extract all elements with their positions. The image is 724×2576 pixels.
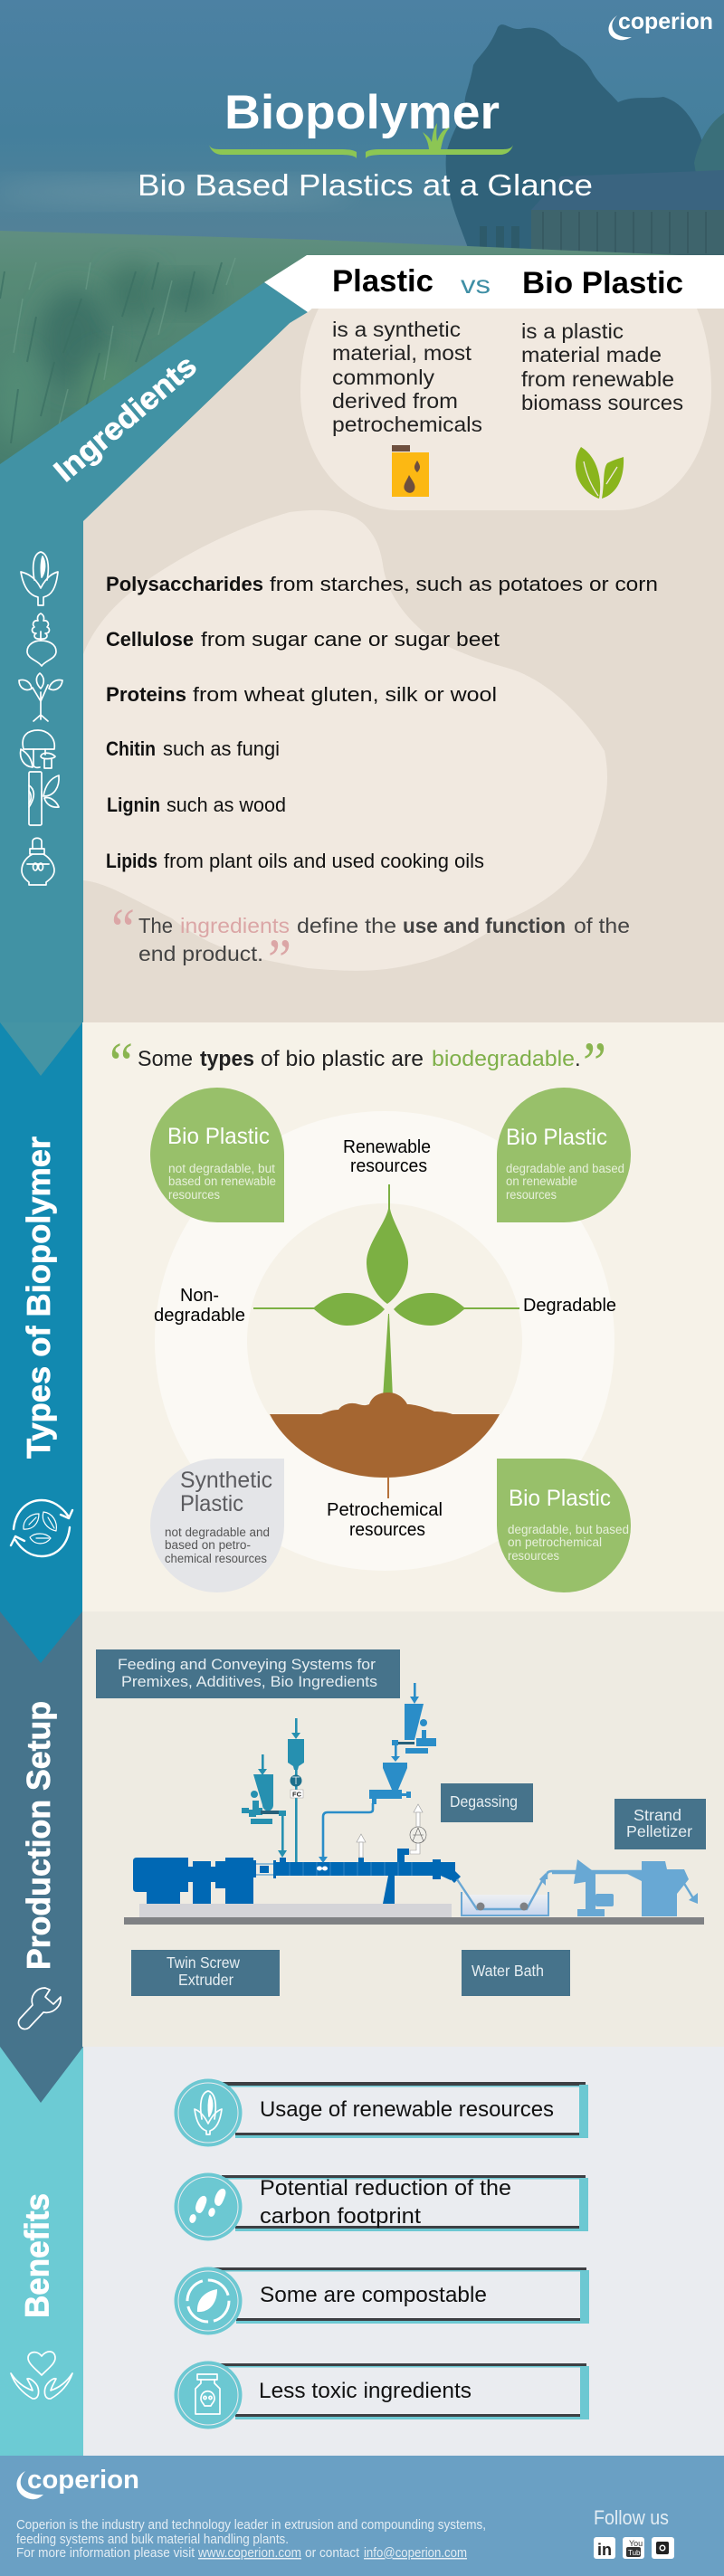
plastic definition: is a synthetic — [332, 318, 461, 341]
plastic definition: derived from — [332, 389, 458, 413]
icon: corn — [21, 552, 58, 605]
quote: ingredients define use: The — [138, 914, 173, 937]
follow us: Follow us — [594, 2506, 669, 2529]
twin screw extruder — [133, 1849, 461, 1904]
logo: coperion top: coperion — [618, 9, 713, 34]
label: twin screw extruder — [131, 1950, 280, 1996]
strand pelletizer — [547, 1859, 698, 1916]
card: synthetic plastic: Synthetic — [180, 1468, 272, 1493]
panel: benefits — [83, 2047, 724, 2456]
types section title: Types of Biopolymer — [20, 1136, 57, 1459]
quote: ingredients define use — [111, 897, 630, 993]
footer text: Coperion is the industry and technology leader in extrusion and compounding systems, — [16, 2517, 486, 2533]
icon: beet — [27, 613, 56, 666]
axis labels: Non- — [180, 1285, 219, 1306]
title brace with grass — [209, 123, 513, 158]
axis labels: resources — [350, 1155, 427, 1176]
item: cellulose — [106, 628, 500, 651]
card: synthetic plastic: based on petro- — [165, 1538, 251, 1552]
footer text: feeding systems and bulk material handling plants. — [16, 2532, 289, 2547]
item: cellulose: from sugar cane or sugar beet — [201, 628, 500, 651]
icon: green leaves — [576, 447, 624, 499]
panel: production setup — [82, 1611, 724, 2047]
item: lignin — [107, 794, 286, 816]
item: lignin: Lignin — [107, 794, 160, 816]
quote: ingredients define use: define the — [297, 914, 396, 937]
types quote: types — [200, 1047, 254, 1071]
card: synthetic plastic: chemical resources — [165, 1552, 267, 1565]
barn — [531, 170, 724, 211]
card: bio plastic degradable renewable: Bio Plastic — [506, 1125, 607, 1150]
axis labels: Renewable — [343, 1136, 431, 1157]
outer ring — [155, 1111, 614, 1571]
label: strand pelletizer: Strand — [634, 1806, 681, 1824]
label: feeding and conveying: Premixes, Additives, Bio Ingredients — [121, 1673, 377, 1690]
card: bio plastic degradable renewable: degradable and based — [506, 1162, 624, 1175]
quote: ingredients define use: use and function — [403, 914, 566, 937]
plastic definition — [332, 318, 482, 436]
card: bio plastic non-degradable renewable — [150, 1088, 284, 1222]
panel: plastic vs bio plastic blob — [300, 309, 711, 510]
footer text: or contact — [305, 2545, 360, 2561]
icon: footprints — [188, 2189, 225, 2224]
item: lipids: Lipids — [106, 850, 157, 872]
quote: ingredients define use: “ — [111, 897, 135, 963]
feeder 2 with flow control — [288, 1718, 304, 1862]
bio plastic definition: is a plastic — [521, 319, 624, 343]
card: bio plastic non-degradable renewable: Bio Plastic — [167, 1124, 270, 1149]
label: water bath — [462, 1950, 570, 1996]
icon: corn — [195, 2091, 222, 2134]
quote: ingredients define use: of the — [574, 914, 630, 937]
ingredients list — [106, 573, 658, 872]
benefits side column — [0, 2047, 83, 2456]
subtitle: Bio Based Plastics at a Glance — [138, 168, 593, 202]
axis labels: degradable — [154, 1305, 245, 1326]
quote: ingredients define use: ” — [268, 927, 291, 993]
item: proteins — [106, 683, 497, 706]
card: bio plastic degradable petrochemical: degradable, but based — [508, 1523, 629, 1536]
benefit: carbon footprint: Potential reduction of the — [260, 2176, 511, 2201]
feeder 3 — [369, 1763, 411, 1804]
bio plastic definition — [521, 319, 683, 414]
card: bio plastic degradable renewable — [497, 1088, 631, 1222]
panel: types of biopolymer — [82, 1022, 724, 1611]
axis labels: Petrochemical — [327, 1499, 443, 1520]
item: chitin: such as fungi — [163, 737, 280, 760]
benefits section title: Benefits — [18, 2193, 56, 2318]
icon: youtube: Tube — [628, 2549, 644, 2557]
comparison headings — [332, 264, 683, 300]
icon: oil bottle — [22, 838, 54, 885]
process diagram — [124, 1683, 704, 1925]
comparison headings: vs — [461, 271, 491, 299]
item: polysaccharides — [106, 573, 658, 595]
comparison headings: Bio Plastic — [522, 266, 683, 300]
item: polysaccharides: Polysaccharides — [106, 573, 263, 595]
plastic definition: material, most — [332, 341, 472, 365]
card: bio plastic non-degradable renewable: based on renewable — [168, 1174, 276, 1188]
types quote: of bio plastic are — [261, 1047, 424, 1071]
item: proteins: Proteins — [106, 683, 186, 706]
bio plastic definition: material made — [521, 343, 662, 366]
item: cellulose: Cellulose — [106, 628, 194, 651]
label: feeding and conveying: Feeding and Conveying Systems for — [118, 1656, 376, 1673]
item: proteins: from wheat gluten, silk or wool — [193, 683, 497, 706]
label: degassing: Degassing — [450, 1792, 518, 1811]
card: bio plastic degradable renewable: on renewable — [506, 1174, 577, 1188]
benefit: compostable: Some are compostable — [260, 2283, 487, 2307]
item: lignin: such as wood — [167, 794, 286, 816]
label: strand pelletizer — [614, 1799, 706, 1849]
card: bio plastic degradable petrochemical — [497, 1459, 631, 1592]
types quote: ” — [583, 1031, 606, 1097]
icon: youtube — [623, 2537, 644, 2559]
benefit: less toxic: Less toxic ingredients — [259, 2379, 472, 2403]
benefit: carbon footprint — [174, 2173, 588, 2240]
icon: heart and hands — [11, 2352, 72, 2399]
card: bio plastic non-degradable renewable: not degradable, but — [168, 1162, 275, 1175]
item: lipids: from plant oils and used cooking oils — [164, 850, 484, 872]
label: twin screw extruder: Extruder — [178, 1971, 233, 1989]
wheat field — [0, 231, 678, 464]
quote: ingredients define use: ingredients — [180, 914, 290, 937]
icon: instagram — [652, 2537, 674, 2559]
axis labels: resources — [349, 1519, 425, 1540]
comparison headings: Plastic — [332, 264, 433, 299]
feeder 2 with flow control: FC — [292, 1790, 302, 1799]
panel: ingredients background — [83, 309, 724, 1022]
label: water bath: Water Bath — [472, 1962, 544, 1980]
tree line — [446, 24, 706, 255]
item: chitin — [106, 737, 280, 760]
plastic definition: petrochemicals — [332, 413, 482, 436]
types quote: . — [575, 1047, 581, 1071]
card: bio plastic degradable renewable: resources — [506, 1188, 557, 1202]
benefit: usage of renewable resources — [174, 2079, 588, 2146]
footer text: www.coperion.com — [197, 2545, 301, 2561]
inner circle — [247, 1203, 522, 1478]
comparison banner — [264, 255, 724, 312]
footer text: For more information please visit — [16, 2545, 195, 2561]
production side column — [0, 1611, 82, 2047]
icon: compost leaf — [187, 2280, 229, 2322]
card: bio plastic non-degradable renewable: resources — [168, 1188, 220, 1202]
icon: recycling leaves — [11, 1500, 72, 1556]
logo: coperion footer: coperion — [27, 2466, 139, 2495]
axis labels: Degradable — [523, 1295, 616, 1316]
types quote: biodegradable — [432, 1047, 575, 1071]
icon: poison bottle — [195, 2374, 220, 2414]
types side column — [0, 1022, 82, 1611]
quote: ingredients define use: end product. — [138, 942, 263, 965]
bio plastic definition: from renewable — [521, 367, 674, 391]
footer background — [0, 2456, 724, 2576]
card: bio plastic degradable petrochemical: Bio Plastic — [509, 1486, 611, 1511]
panel: ingredients blob — [83, 510, 607, 971]
icon: mushrooms — [21, 730, 55, 768]
feeder 4 — [391, 1683, 436, 1762]
vent 1 — [357, 1834, 366, 1858]
types quote: Some — [138, 1047, 193, 1071]
card: synthetic plastic: not degradable and — [165, 1526, 270, 1539]
water bath — [457, 1873, 548, 1916]
diagram: seedling in soil — [253, 1184, 519, 1498]
icon: youtube: You — [629, 2539, 643, 2548]
label: twin screw extruder: Twin Screw — [167, 1953, 240, 1972]
base plate — [124, 1917, 704, 1925]
icon: branch with leaves — [19, 673, 62, 721]
card: bio plastic degradable petrochemical: resources — [508, 1549, 559, 1563]
label: feeding and conveying — [96, 1649, 400, 1698]
icon: wood log with leaves — [29, 772, 59, 825]
icon: linkedin — [594, 2537, 615, 2559]
benefit: carbon footprint: carbon footprint — [260, 2204, 421, 2229]
bio plastic definition: biomass sources — [521, 391, 683, 414]
card: synthetic plastic: Plastic — [180, 1491, 243, 1516]
ingredients section title: Ingredients — [48, 348, 204, 489]
icon: wrench — [18, 1988, 61, 2029]
label: degassing — [441, 1783, 533, 1822]
title: Biopolymer — [224, 86, 500, 139]
feeder 1 — [242, 1754, 287, 1858]
footer text — [16, 2517, 486, 2561]
icon: linkedin: in — [597, 2541, 612, 2559]
axis labels — [154, 1136, 616, 1540]
chevron: types — [0, 1611, 82, 1663]
item: chitin: Chitin — [106, 737, 156, 760]
item: polysaccharides: from starches, such as potatoes or corn — [270, 573, 658, 595]
platform — [139, 1904, 452, 1917]
chevron: production — [0, 2047, 83, 2103]
chevron: ingredients — [0, 1022, 82, 1076]
card: bio plastic degradable petrochemical: on petrochemical — [508, 1535, 602, 1549]
plastic definition: commonly — [332, 366, 434, 389]
header photo background — [0, 0, 724, 480]
types quote — [110, 1031, 606, 1097]
vent 2 with vacuum pump — [410, 1804, 426, 1854]
label: strand pelletizer: Pelletizer — [626, 1822, 692, 1840]
types quote: “ — [110, 1031, 133, 1097]
footer text: info@coperion.com — [364, 2545, 467, 2561]
benefit: less toxic — [174, 2362, 589, 2429]
card: synthetic plastic — [150, 1459, 284, 1592]
benefit: compostable — [174, 2267, 589, 2334]
ingredients side band — [0, 282, 308, 1022]
production section title: Production Setup — [20, 1701, 57, 1970]
benefit: usage of renewable resources: Usage of renewable resources — [260, 2097, 554, 2122]
icon: oil canister — [392, 445, 429, 497]
